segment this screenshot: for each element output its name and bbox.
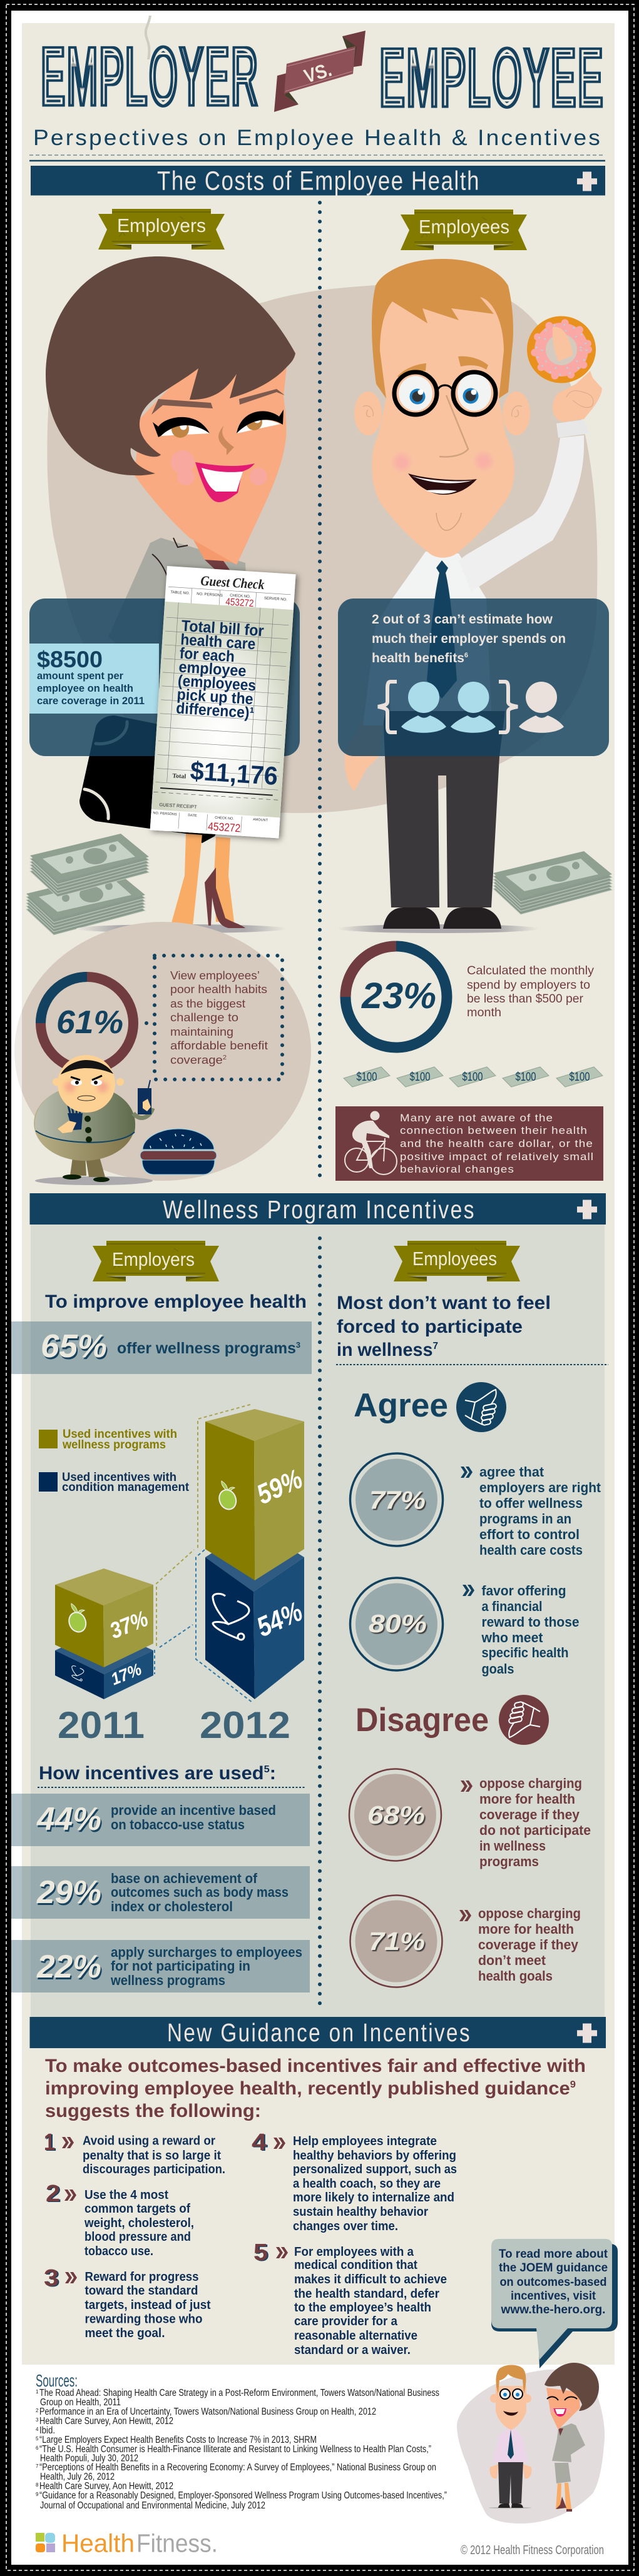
taupe backdrop blob	[47, 285, 597, 813]
nose	[218, 425, 234, 455]
section banner: guidance	[30, 2017, 606, 2048]
guidance item 5: makes it difficult to achieve	[294, 2273, 447, 2286]
guidance item 5: For employees with a	[294, 2245, 414, 2259]
icon: cyclist	[345, 1111, 397, 1174]
stat band 44%: provide an incentive based	[111, 1802, 276, 1818]
tie	[427, 560, 457, 699]
logo: HealthFitness	[36, 2529, 218, 2558]
guest check	[150, 566, 296, 838]
guidance item 1: 1	[44, 2129, 55, 2156]
subtitle: Perspectives on Employee Health & Incentives	[33, 126, 602, 150]
stat 71%: coverage if they	[478, 1937, 579, 1952]
guidance item 5: medical condition that	[294, 2258, 417, 2272]
agree heading with icon: Agree	[354, 1387, 448, 1424]
legs	[169, 834, 234, 932]
burger icon	[140, 1129, 217, 1174]
stat 71%: more for health	[478, 1921, 574, 1937]
guest check: NO. PERSONS	[197, 592, 223, 598]
guidance item 4: personalized support, such as	[293, 2163, 457, 2176]
character: employee man	[345, 259, 602, 929]
stat 80%: who meet	[481, 1630, 543, 1645]
floor shadow man	[337, 924, 539, 933]
stat 68%: 68%	[367, 1801, 425, 1829]
speech bubble: www.the-hero.org.	[500, 2303, 606, 2316]
guidance item 3: meet the goal.	[85, 2326, 165, 2340]
legend	[39, 1428, 190, 1494]
grey wellness panel	[31, 1225, 605, 2017]
speech bubble: the JOEM guidance	[499, 2261, 608, 2275]
stat 77%: agree that	[479, 1464, 544, 1480]
guidance item 2: common targets of	[84, 2202, 190, 2216]
callout text right	[372, 612, 566, 665]
guidance item 2: blood pressure and	[84, 2230, 191, 2244]
section banner: wellness	[30, 1193, 606, 1225]
row of $100 bills	[344, 1067, 603, 1087]
guidance item 2: weight, cholesterol,	[84, 2216, 194, 2230]
guidance item 5: 5	[253, 2240, 268, 2266]
sources list: 7	[36, 2463, 39, 2469]
guidance item 3	[44, 2265, 211, 2340]
guidance item 5: reasonable alternative	[294, 2329, 417, 2343]
stat 77%: employers are right	[479, 1480, 601, 1495]
employers ribbon 2	[93, 1241, 219, 1281]
stat band 29%: index or cholesterol	[111, 1899, 233, 1914]
employees ribbon	[401, 210, 527, 250]
heading: most dont want: in wellness	[337, 1340, 437, 1360]
dotted box with text: as the biggest	[170, 997, 245, 1010]
guidance intro	[45, 2056, 586, 2121]
callout text right: 6	[464, 652, 468, 659]
stat band 44%: on tobacco-use status	[111, 1817, 245, 1832]
stat band 65%: 3	[296, 1340, 300, 1350]
blush	[171, 450, 195, 474]
mouth	[195, 462, 255, 502]
dotted box with text: View employees’	[170, 969, 260, 982]
sources list: “The U.S. Health Consumer is Health-Finance Illiterate and Resistant to Linking Wellness to Health Plan Costs,”	[39, 2444, 431, 2455]
floor shadow woman	[76, 924, 287, 933]
wellness center divider	[318, 1238, 322, 2011]
guidance item 1: discourages participation.	[83, 2163, 225, 2176]
mini man	[489, 2365, 531, 2509]
dotted box with text: maintaining	[170, 1025, 233, 1038]
stat 71%: don’t meet	[478, 1952, 546, 1968]
section banner: costs	[31, 166, 605, 196]
heading: most dont want: Most don’t want to feel	[337, 1293, 551, 1313]
row of $100 bills: $100	[357, 1071, 377, 1084]
heading how incentives are used: How incentives are used	[39, 1763, 258, 1784]
guest check: NO. PERSONS	[153, 811, 177, 817]
guidance intro: 9	[570, 2079, 576, 2090]
shadow	[35, 1176, 153, 1185]
guidance item 5: to the employee’s health	[294, 2301, 431, 2315]
sources list: Health Care Survey, Aon Hewitt, 2012	[39, 2416, 173, 2427]
dotted box with text	[145, 956, 282, 1079]
cheeks	[394, 454, 410, 470]
stat band 65%	[11, 1321, 312, 1374]
shirt cuff	[556, 420, 590, 438]
cyclist callout: positive impact of relatively small	[400, 1151, 594, 1163]
section banner: wellness: Wellness Program Incentives	[163, 1195, 476, 1224]
guest check: AMOUNT	[253, 818, 268, 822]
stat 68%: in wellness	[479, 1838, 546, 1854]
cyclist callout	[335, 1106, 603, 1181]
logo: HealthFitness: Health	[61, 2529, 135, 2558]
nose	[439, 395, 468, 457]
row of $100 bills: $100	[462, 1071, 483, 1084]
neck	[192, 538, 249, 565]
dotted box with text: affordable benefit	[170, 1039, 268, 1052]
eyes	[161, 420, 280, 436]
stat 71%: 71%	[369, 1927, 425, 1956]
dotted box with text: coverage	[170, 1053, 218, 1066]
guidance item 2: tobacco use.	[84, 2245, 153, 2258]
shirt	[363, 552, 491, 725]
stat 80%	[350, 1578, 580, 1677]
legend: Used incentives with	[62, 1471, 176, 1484]
employers ribbon 2: Employers	[112, 1248, 195, 1270]
heading: most dont want	[337, 1293, 551, 1360]
stat band 22%: wellness programs	[110, 1972, 225, 1988]
employees ribbon 2	[394, 1241, 520, 1281]
stat box $8500: employee on health	[37, 682, 133, 694]
connector dashes	[155, 1404, 252, 1702]
guidance item 1: penalty that is so large it	[83, 2149, 221, 2163]
donut hand	[553, 371, 602, 422]
guidance item 4: more likely to internalize and	[293, 2191, 454, 2205]
donut chart 61%: 61%	[56, 1004, 123, 1041]
guest check: TABLE NO.	[170, 590, 190, 595]
bar: 2012 incentives	[205, 1409, 307, 1699]
pants	[383, 711, 505, 907]
bar: 2011 incentives: 17%	[108, 1660, 144, 1689]
disagree heading with icon: Disagree	[355, 1702, 489, 1739]
heading how incentives are used: 5	[264, 1764, 270, 1775]
guidance item 1	[44, 2129, 225, 2176]
sources list: 9	[36, 2492, 39, 2497]
sources list: The Road Ahead: Shaping Health Care Strategy in a Post-Reform Environment, Towers Watson/National Business	[39, 2388, 439, 2398]
buttons	[84, 1116, 92, 1143]
guidance item 2: 2	[46, 2181, 60, 2207]
guidance item 4: a health coach, so they are	[293, 2177, 441, 2191]
left hand	[345, 719, 383, 791]
hair	[61, 1060, 113, 1074]
guest check: CHECK NO.	[230, 594, 251, 599]
guidance item 3: 3	[44, 2265, 59, 2291]
handbag	[79, 715, 263, 843]
guidance item 3: toward the standard	[85, 2284, 198, 2298]
guest check: (employees	[177, 672, 257, 695]
disagree heading with icon	[355, 1695, 549, 1745]
speech bubble: To read more about	[499, 2248, 608, 2261]
sources list: Performance in an Era of Uncertainty, Towers Watson/National Business Group on Health, 2012	[39, 2407, 376, 2417]
shoes	[383, 907, 501, 929]
face	[135, 367, 287, 565]
text: calculated monthly spend	[467, 964, 594, 1019]
stat 80%: specific health	[482, 1645, 568, 1660]
money stack right	[493, 851, 612, 914]
text: calculated monthly spend: be less than $500 per	[467, 992, 583, 1006]
stat 68%: more for health	[479, 1791, 575, 1807]
sources list: 6	[36, 2445, 39, 2451]
guidance item 5: the health standard, defer	[294, 2287, 439, 2301]
stat 68%: do not participate	[479, 1822, 591, 1838]
sources list: 5	[36, 2436, 39, 2442]
jacket	[108, 538, 250, 675]
section banner: costs: The Costs of Employee Health	[157, 166, 480, 196]
year labels	[58, 1704, 290, 1746]
legend: wellness programs	[62, 1438, 166, 1452]
donut chart 23%: 23%	[361, 976, 436, 1016]
callout panel right	[338, 599, 609, 756]
sources list: 2	[36, 2408, 39, 2413]
guest check: $11,176	[189, 756, 279, 790]
bar: 2012 incentives: 54%	[252, 1596, 307, 1643]
stat 68%: programs	[479, 1854, 539, 1869]
legs	[70, 1153, 105, 1177]
guest check: 453272	[208, 820, 241, 834]
row of $100 bills: $100	[516, 1071, 536, 1084]
hair	[372, 259, 513, 398]
stat 71%	[350, 1895, 581, 1988]
bar: 2012 incentives: 59%	[252, 1463, 307, 1510]
sources list: Health Populi, July 30, 2012	[40, 2453, 138, 2464]
guest check: Total bill for	[181, 617, 265, 640]
guidance item 3: rewarding those who	[85, 2313, 203, 2326]
sources list: 8	[36, 2482, 39, 2488]
stat 80%: reward to those	[482, 1614, 580, 1630]
guest check: SERVER NO.	[264, 597, 287, 602]
row of $100 bills: $100	[570, 1071, 590, 1084]
bar: 2011 incentives	[55, 1568, 153, 1699]
stat box $8500: amount spent per	[37, 670, 123, 682]
heading: improve health: To improve employee health	[45, 1291, 307, 1312]
guest check: pick up the	[176, 685, 254, 708]
speech bubble: incentives, visit	[511, 2290, 596, 2303]
taupe blob behind 61%	[14, 922, 311, 1181]
title: EMPLOYER	[40, 29, 258, 124]
year labels: 2012	[200, 1704, 290, 1746]
dotted box with text: 2	[223, 1054, 227, 1061]
callout text right: 2 out of 3 can’t estimate how	[372, 612, 553, 627]
legend: condition management	[62, 1481, 190, 1494]
legend: Used incentives with	[63, 1428, 177, 1441]
donut chart 61%	[41, 977, 133, 1069]
sources heading: Sources:	[36, 2371, 78, 2390]
stat band 22%: apply surcharges to employees	[111, 1944, 302, 1960]
sources list: “Large Employers Expect Health Benefits Costs to Increase 7% in 2013, SHRM	[39, 2435, 317, 2445]
stat 80%: 80%	[369, 1609, 427, 1638]
guest check: CHECK NO.	[215, 816, 234, 821]
fries and hand	[68, 1113, 83, 1130]
text: calculated monthly spend: Calculated the monthly	[467, 964, 594, 977]
stat box $8500: $8500	[37, 647, 103, 672]
shoes	[63, 1174, 81, 1179]
stat band 65%: 65%	[41, 1328, 107, 1365]
callout text right: much their employer spends on	[372, 632, 566, 646]
callout text right: health benefits	[372, 651, 464, 665]
guidance intro: To make outcomes-based incentives fair and effective with	[45, 2056, 586, 2076]
dotted box with text: poor health habits	[170, 982, 267, 996]
stat band 29%	[11, 1866, 310, 1919]
guidance intro: suggests the following:	[45, 2101, 261, 2121]
raised arm	[459, 435, 584, 592]
employers ribbon	[98, 209, 225, 250]
guidance item 4: healthy behaviors by offering	[293, 2149, 456, 2163]
footer backdrop blob	[457, 2370, 605, 2523]
text: calculated monthly spend: spend by employers to	[467, 978, 590, 992]
eyebrows	[151, 389, 285, 415]
donut	[527, 316, 596, 383]
stat band 29%: 29%	[36, 1874, 101, 1911]
shoes	[205, 867, 245, 928]
bar: 2011 incentives: 37%	[106, 1605, 151, 1644]
heading: most dont want: 7	[432, 1341, 438, 1351]
sources list: “Perceptions of Health Benefits in a Recovering Economy: A Survey of Employees,” National Business Group on	[39, 2462, 436, 2473]
character: overweight man	[34, 1055, 153, 1185]
cyclist callout: connection between their health	[400, 1124, 588, 1136]
guidance item 5: care provider for a	[294, 2315, 398, 2328]
guidance item 4	[252, 2129, 457, 2233]
guidance item 3: targets, instead of just	[85, 2298, 211, 2312]
sources list: “Guidance for a Reasonably Designed, Employer-Sponsored Wellness Program Using Outcomes-based Incentives,”	[39, 2490, 447, 2501]
mouth	[408, 473, 477, 495]
vs ribbon: VS.	[302, 58, 334, 88]
character: employer woman	[46, 256, 295, 941]
stat 71%: health goals	[478, 1968, 553, 1984]
sources list: Health, July 26, 2012	[40, 2472, 115, 2482]
guidance item 1: Avoid using a reward or	[83, 2134, 215, 2148]
stat band 29%: outcomes such as body mass	[111, 1884, 289, 1900]
stat 80%: favor offering	[482, 1583, 566, 1599]
sources list: Journal of Occupational and Environmental Medicine, July 2012	[40, 2500, 265, 2511]
glasses	[394, 372, 496, 415]
speech bubble: on outcomes-based	[499, 2276, 607, 2289]
sources list: Health Care Survey, Aon Hewitt, 2012	[39, 2481, 173, 2492]
section banner: guidance: New Guidance on Incentives	[167, 2018, 471, 2047]
sources list: Group on Health, 2011	[40, 2397, 121, 2408]
dotted box with text: challenge to	[170, 1011, 238, 1024]
sources list	[36, 2388, 447, 2511]
text: calculated monthly spend: month	[467, 1006, 501, 1019]
stat band 22%: 22%	[36, 1949, 101, 1985]
grunge crack	[146, 16, 150, 59]
stat 77%: to offer wellness	[479, 1495, 583, 1511]
head	[58, 1055, 115, 1113]
stat band 44%: 44%	[36, 1801, 101, 1837]
year labels: 2011	[58, 1704, 145, 1746]
face	[372, 297, 514, 558]
guidance item 4: Help employees integrate	[293, 2134, 437, 2148]
stat 68%: oppose charging	[479, 1775, 582, 1791]
cyclist callout: and the health care dollar, or the	[400, 1138, 593, 1149]
guidance item 5: standard or a waiver.	[294, 2343, 411, 2357]
stat box $8500	[29, 644, 159, 714]
mini woman	[544, 2363, 599, 2512]
stat band 29%: base on achievement of	[111, 1871, 258, 1886]
cyclist callout: behavioral changes	[400, 1163, 514, 1175]
sources list: 4	[36, 2427, 39, 2432]
guidance item 3: Reward for progress	[85, 2270, 199, 2284]
stat band 65%: offer wellness programs	[117, 1340, 298, 1357]
stat band 44%	[11, 1794, 310, 1846]
heading how incentives are used: :	[270, 1763, 276, 1784]
guidance item 2: Use the 4 most	[84, 2188, 168, 2202]
guest check: Guest Check	[200, 573, 265, 592]
stat box $8500: care coverage in 2011	[37, 695, 145, 707]
employers ribbon: Employers	[117, 215, 206, 236]
guidance item 2	[46, 2181, 194, 2258]
eyes brows mouth	[71, 1079, 82, 1086]
guest check: Total	[172, 772, 187, 780]
heading: most dont want: forced to participate	[337, 1316, 523, 1337]
center dotted divider	[318, 203, 322, 1184]
sources list: 1	[36, 2389, 39, 2395]
vs ribbon	[274, 31, 366, 112]
stat band 22%	[11, 1940, 310, 1993]
stat 80%: a financial	[482, 1599, 542, 1614]
guest check: employee	[178, 659, 247, 680]
guest check: 453272	[225, 597, 254, 609]
guidance item 4: sustain healthy behavior	[293, 2205, 428, 2219]
donut chart 23%	[345, 946, 447, 1048]
stat 77%: 77%	[369, 1486, 426, 1515]
guest check: difference)¹	[175, 699, 255, 722]
chin	[436, 513, 461, 530]
ears	[354, 391, 382, 435]
people icons 2 of 3	[378, 682, 564, 733]
sources list: 3	[36, 2417, 39, 2423]
employees ribbon: Employees	[419, 216, 509, 238]
money stack left	[26, 834, 149, 935]
belly	[34, 1086, 135, 1161]
stat 80%: goals	[482, 1661, 514, 1677]
guest check: GUEST RECEIPT	[159, 802, 197, 810]
agree heading with icon	[354, 1382, 506, 1432]
speech bubble	[491, 2239, 618, 2368]
stat 68%: coverage if they	[479, 1807, 580, 1822]
guidance item 4: changes over time.	[293, 2220, 398, 2233]
callout panel left	[29, 599, 300, 756]
right arm and drink	[133, 1108, 153, 1118]
stat 71%: oppose charging	[478, 1906, 581, 1921]
sweater	[35, 1086, 135, 1144]
logo: HealthFitness: Fitness.	[136, 2529, 218, 2558]
stat 77%: effort to control	[479, 1527, 580, 1542]
guest check: for each	[179, 645, 235, 665]
stat 68%	[349, 1769, 591, 1869]
sources list: Ibid.	[39, 2425, 55, 2436]
cyclist callout: Many are not aware of the	[400, 1112, 553, 1124]
guest check: health care	[180, 631, 256, 653]
row of $100 bills: $100	[409, 1071, 431, 1084]
blob overflow tint	[11, 1001, 22, 1101]
stat 77%	[350, 1453, 601, 1558]
guidance item 5	[253, 2240, 447, 2357]
guest check: DATE	[188, 814, 197, 818]
guidance intro: improving employee health, recently published guidance	[45, 2078, 552, 2099]
stat 77%: health care costs	[479, 1542, 583, 1558]
eyebrows	[397, 356, 488, 378]
stat band 22%: for not participating in	[111, 1958, 250, 1974]
hair	[46, 256, 295, 475]
employees ribbon 2: Employees	[412, 1248, 497, 1270]
stat 77%: programs in an	[479, 1511, 571, 1527]
guidance item 4: 4	[252, 2129, 267, 2156]
